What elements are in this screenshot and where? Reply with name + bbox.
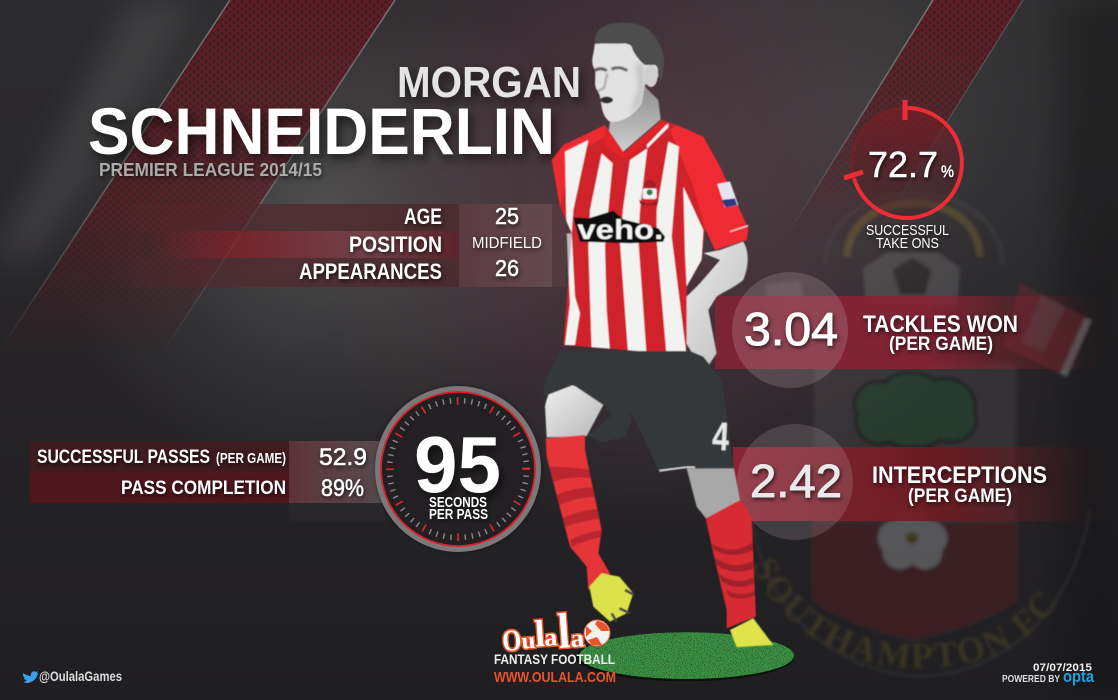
grass base	[576, 632, 794, 681]
handle text: @OulalaGames	[39, 669, 122, 684]
take-on caption	[866, 222, 949, 252]
take-on caption: SUCCESSFUL	[866, 222, 949, 239]
boot studs	[612, 590, 634, 622]
tackles per game: (PER GAME)	[889, 334, 993, 355]
per pass caption: PER PASS	[429, 506, 488, 523]
white shirt stripes	[565, 123, 703, 357]
name heading	[88, 58, 581, 180]
logo wordmark: u	[521, 628, 536, 654]
tackles label: TACKLES WON	[863, 311, 1018, 338]
percent sign: %	[941, 162, 954, 181]
shorts number: 4	[711, 415, 731, 459]
per game note: (PER GAME)	[216, 451, 286, 467]
appearances row: 26	[495, 255, 519, 281]
faded Southampton crest: SOUTHAMPTON FC	[754, 558, 1056, 668]
surname: SCHNEIDERLIN	[88, 94, 555, 168]
faded Southampton crest	[754, 199, 1090, 668]
near arm	[678, 242, 748, 368]
far boot	[730, 618, 773, 647]
stopwatch gauge	[375, 386, 541, 552]
interceptions value: 2.42	[750, 455, 842, 507]
interceptions per game: (PER GAME)	[908, 486, 1012, 507]
take-on caption: TAKE ONS	[876, 235, 939, 252]
club badge	[639, 180, 659, 205]
position row: POSITION	[349, 232, 442, 257]
pass completion label: PASS COMPLETION	[121, 478, 286, 499]
pass completion value: 89%	[321, 475, 364, 502]
appearances row	[299, 255, 519, 284]
sponsor patch	[573, 211, 665, 243]
dial ticks	[844, 100, 905, 178]
interceptions label: INTERCEPTIONS	[872, 462, 1047, 489]
player upper body	[547, 23, 760, 368]
age row	[404, 203, 519, 229]
face shading	[630, 63, 645, 115]
hair	[595, 23, 664, 82]
appearances row: APPEARANCES	[299, 259, 442, 284]
near sock	[545, 434, 610, 590]
logo tagline: FANTASY FOOTBALL	[494, 651, 615, 667]
brand: Oulala logo	[494, 601, 616, 686]
position row: MIDFIELD	[472, 235, 542, 252]
logo ball	[584, 620, 610, 646]
logo wordmark	[500, 601, 586, 663]
near knee	[545, 385, 603, 437]
panel: interceptions	[733, 424, 1098, 540]
shirt	[551, 120, 749, 352]
panel: passing stats	[30, 441, 385, 521]
first name: MORGAN	[397, 58, 581, 107]
neck	[608, 87, 661, 152]
diagonal stripe: right	[798, 0, 1024, 216]
sponsor wordmark: veho.	[577, 214, 663, 245]
shirt hem and cuff	[730, 226, 748, 232]
logo url: WWW.OULALA.COM	[494, 669, 616, 686]
seconds caption: SECONDS	[429, 494, 487, 511]
passes value: 52.9	[319, 444, 367, 471]
shorts hem	[659, 467, 695, 471]
age row: 25	[495, 203, 519, 229]
logo wordmark: l	[533, 613, 546, 656]
sleeve patch	[717, 181, 738, 207]
take-on value: 72.7	[868, 144, 938, 185]
panel: player facts	[120, 203, 566, 287]
twitter handle	[23, 669, 122, 684]
icon: twitter bird	[23, 671, 38, 683]
logo wordmark: a	[569, 623, 585, 653]
successful passes label: SUCCESSFUL PASSES	[37, 447, 210, 468]
shorts	[543, 351, 734, 473]
logo wordmark: l	[556, 602, 572, 659]
credit: date and opta	[1002, 662, 1094, 686]
ear	[644, 65, 658, 87]
diagonal stripe: left	[0, 0, 395, 350]
powered by: POWERED BY	[1002, 674, 1060, 685]
tackles value: 3.04	[744, 303, 838, 355]
faded crest scarf	[765, 280, 1092, 377]
take-ons dial	[844, 100, 962, 252]
logo wordmark: O	[501, 624, 522, 658]
player lower body	[540, 351, 773, 647]
face	[592, 43, 658, 122]
date: 07/07/2015	[1033, 662, 1092, 674]
near boot	[589, 573, 633, 622]
season subtitle: PREMIER LEAGUE 2014/15	[99, 160, 322, 180]
eyes and brows	[594, 68, 627, 71]
opta logo: opta	[1063, 667, 1094, 686]
mouth	[600, 97, 613, 103]
position row	[349, 232, 542, 257]
player photo illustration	[540, 23, 773, 647]
far sock	[705, 500, 757, 629]
nose shadow	[598, 73, 607, 91]
seconds value: 95	[414, 420, 501, 509]
far knee	[687, 468, 741, 519]
panel: tackles won	[715, 272, 1100, 388]
far arm	[567, 233, 575, 303]
age row: AGE	[404, 204, 442, 229]
logo wordmark: a	[543, 624, 559, 652]
sleeve patch emblem	[722, 198, 737, 207]
